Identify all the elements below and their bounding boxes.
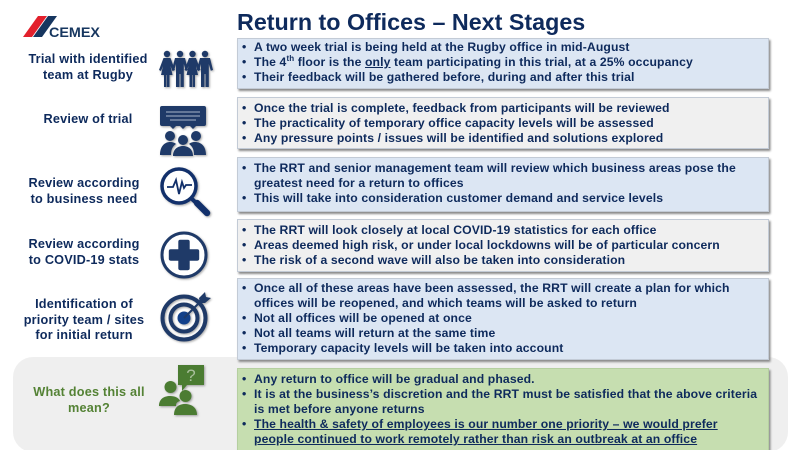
label: business need: to business need xyxy=(31,192,137,206)
panel: priority teams: Not all teams will return at the same time xyxy=(254,326,495,340)
panel: priority teams: • xyxy=(242,281,246,295)
panel: business need: The RRT and senior management team will review which business areas pose the xyxy=(254,161,736,175)
panel: priority teams: Not all offices will be opened at once xyxy=(254,311,472,325)
panel: trial: • xyxy=(242,40,246,54)
panel: what does this all mean: people continued to work remotely rather than risk an outbreak at an office xyxy=(254,432,697,446)
label: trial: Trial with identified xyxy=(28,52,148,66)
panel: business need: greatest need for a return to offices xyxy=(254,176,464,190)
panel: priority teams: • xyxy=(242,311,246,325)
panel: trial: A two week trial is being held at the Rugby office in mid-August xyxy=(254,40,630,54)
label: what does this all mean: mean? xyxy=(68,401,110,415)
label: priority teams xyxy=(24,297,144,342)
label: covid stats: Review according xyxy=(28,237,140,251)
panel: business need: This will take into consideration customer demand and service levels xyxy=(254,191,663,205)
panel: what does this all mean: is met before anyone returns xyxy=(254,402,425,416)
panel: priority teams: Temporary capacity levels will be taken into account xyxy=(254,341,563,355)
icon: medical cross xyxy=(160,231,210,281)
panel: review of trial: • xyxy=(242,101,246,115)
icon: target with arrow xyxy=(160,292,212,344)
panel: what does this all mean: It is at the business’s discretion and the RRT must be satisfied that the above criteria xyxy=(254,387,757,401)
panel: priority teams xyxy=(237,278,769,360)
panel: trial: • xyxy=(242,70,246,84)
panel: covid stats: The RRT will look closely at local COVID-19 statistics for each office xyxy=(254,223,657,237)
panel: what does this all mean: The health & safety of employees is our number one priority – we would prefer xyxy=(254,417,718,431)
label: priority teams: priority team / sites xyxy=(24,313,144,327)
panel: review of trial: Once the trial is complete, feedback from participants will be reviewed xyxy=(254,101,670,115)
panel: review of trial xyxy=(237,97,769,149)
panel: review of trial: • xyxy=(242,131,246,145)
panel: what does this all mean xyxy=(237,368,769,450)
logo: Cemex: CEMEX xyxy=(49,25,100,40)
panel: review of trial: Any pressure points / issues will be identified and solutions explored xyxy=(254,131,663,145)
label: business need xyxy=(28,176,140,206)
panel: what does this all mean: • xyxy=(242,387,246,401)
panel: business need xyxy=(237,157,769,212)
panel: trial: The 4th floor is the only team participating in this trial, at a 25% occupancy xyxy=(254,54,693,69)
label: covid stats xyxy=(28,237,140,267)
panel: covid stats: • xyxy=(242,223,246,237)
panel: business need: • xyxy=(242,161,246,175)
panel: covid stats: • xyxy=(242,238,246,252)
icon: magnifying glass with pulse xyxy=(160,167,212,218)
title: Return to Offices – Next Stages xyxy=(237,9,585,35)
panel: review of trial: The practicality of temporary office capacity levels will be assessed xyxy=(254,116,654,130)
panel: trial xyxy=(237,38,769,89)
panel: covid stats: The risk of a second wave will also be taken into consideration xyxy=(254,253,625,267)
icon: team of people xyxy=(159,50,215,90)
panel: covid stats: • xyxy=(242,253,246,267)
panel: what does this all mean: • xyxy=(242,417,246,431)
panel: business need: • xyxy=(242,191,246,205)
panel: covid stats xyxy=(237,219,769,272)
label: priority teams: Identification of xyxy=(35,297,133,311)
panel: summary background xyxy=(13,357,788,450)
label: priority teams: for initial return xyxy=(35,328,133,342)
label: business need: Review according xyxy=(28,176,140,190)
panel: priority teams: Once all of these areas have been assessed, the RRT will create a plan for which xyxy=(254,281,730,295)
label: covid stats: to COVID-19 stats xyxy=(29,253,139,267)
panel: priority teams: • xyxy=(242,341,246,355)
logo: Cemex xyxy=(23,16,100,40)
panel: priority teams: offices will be reopened, and which teams will be asked to return xyxy=(254,296,637,310)
panel: review of trial: • xyxy=(242,116,246,130)
panel: trial: Their feedback will be gathered before, during and after this trial xyxy=(254,70,635,84)
label: trial xyxy=(28,52,148,82)
label: what does this all mean xyxy=(33,385,145,415)
label: trial: team at Rugby xyxy=(43,68,133,82)
panel: priority teams: • xyxy=(242,326,246,340)
panel: what does this all mean: • xyxy=(242,372,246,386)
panel: trial: • xyxy=(242,55,246,69)
panel: what does this all mean: Any return to office will be gradual and phased. xyxy=(254,372,535,386)
icon: people with question bubble: ? xyxy=(186,366,196,385)
panel: covid stats: Areas deemed high risk, or under local lockdowns will be of particular concern xyxy=(254,238,720,252)
label: review of trial: Review of trial xyxy=(43,112,133,126)
icon: speech bubble over group xyxy=(160,106,208,158)
icon: people with question bubble xyxy=(158,364,206,418)
label: what does this all mean: What does this all xyxy=(33,385,145,399)
